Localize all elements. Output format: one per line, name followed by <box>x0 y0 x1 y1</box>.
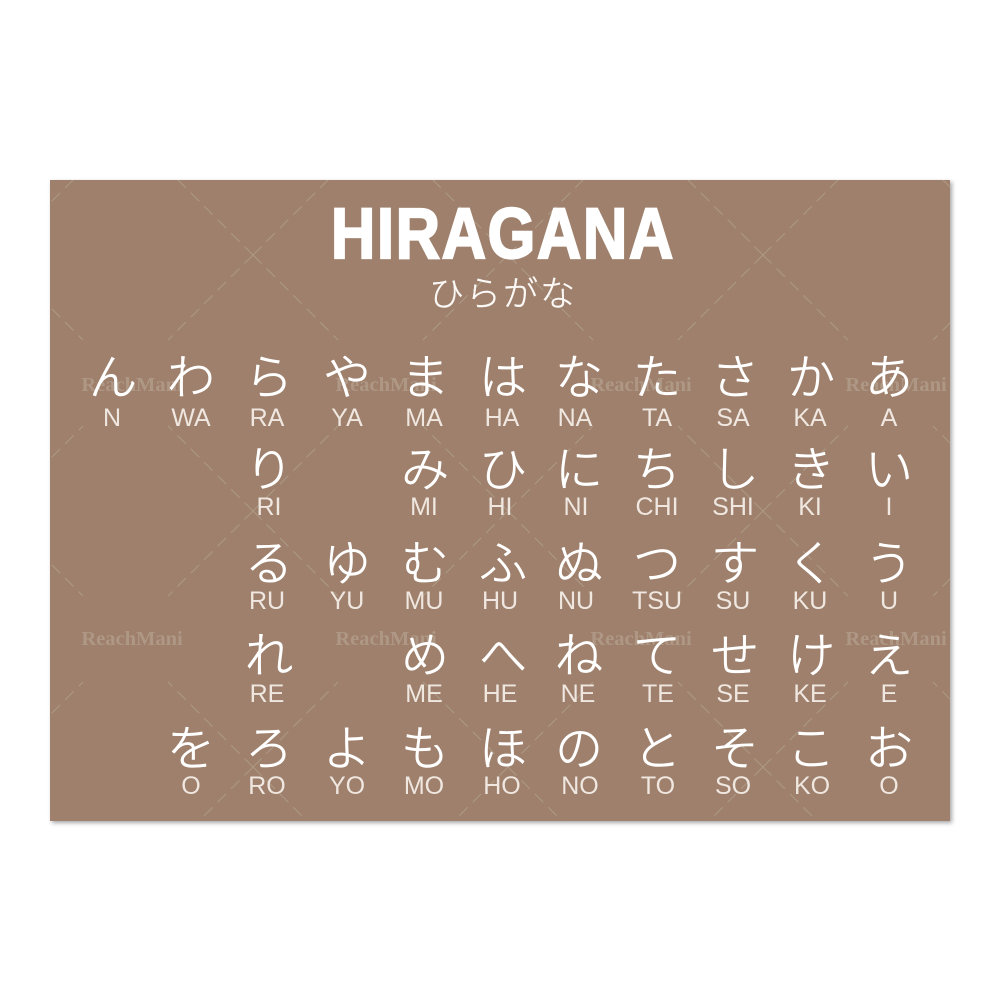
row 2: i-column: NI <box>564 493 588 521</box>
row 5: o-column: MO <box>404 772 444 800</box>
row 4: e-column: ME <box>405 680 443 708</box>
row 4: e-column: け <box>787 630 835 683</box>
watermarks: ReachMani <box>590 628 692 650</box>
watermarks: ReachMani <box>590 374 692 396</box>
panel: brown background <box>50 180 950 821</box>
row 2: i-column: I <box>886 493 892 521</box>
row 3: u-column: YU <box>330 587 364 615</box>
watermarks: ReachMani <box>845 628 947 650</box>
row 4: e-column: E <box>881 680 897 708</box>
row 2: i-column: CHI <box>635 493 679 521</box>
row 4: e-column: れ <box>245 630 293 683</box>
row 4: e-column: め <box>401 630 449 683</box>
row 2: i-column: ち <box>633 444 681 497</box>
watermarks: ReachMani <box>335 374 437 396</box>
row 1: a-column: た <box>633 352 681 405</box>
row 3: u-column <box>245 538 913 615</box>
row 4: e-column: SE <box>716 680 750 708</box>
row 5: o-column: お <box>865 723 913 776</box>
row 1: a-column: TA <box>642 404 672 432</box>
row 1: a-column: な <box>555 352 603 405</box>
row 3: u-column: ゆ <box>323 538 371 591</box>
row 5: o-column: ろ <box>245 723 293 776</box>
row 3: u-column: く <box>787 538 835 591</box>
row 4: e-column: ね <box>555 630 603 683</box>
row 5: o-column: HO <box>483 772 521 800</box>
row 3: u-column: U <box>880 587 898 615</box>
row 4: e-column: HE <box>483 680 517 708</box>
row 1: a-column: N <box>103 404 121 432</box>
row 5: o-column: を <box>167 723 215 776</box>
row 3: u-column: MU <box>405 587 443 615</box>
row 3: u-column: HU <box>482 587 518 615</box>
row 5: o-column: そ <box>711 723 759 776</box>
watermarks: ReachMani <box>81 374 183 396</box>
row 5: o-column: と <box>633 723 681 776</box>
row 1: a-column: SA <box>716 404 750 432</box>
row 5: o-column: も <box>401 723 449 776</box>
row 5: o-column: O <box>181 772 201 800</box>
row 3: u-column: NU <box>558 587 594 615</box>
row 2: i-column: に <box>555 444 603 497</box>
row 2: i-column: RI <box>256 493 282 521</box>
row 1: a-column: わ <box>167 352 215 405</box>
row 1: a-column <box>89 352 913 432</box>
row 2: i-column: ひ <box>479 444 527 497</box>
title: HIRAGANA <box>331 195 675 274</box>
row 3: u-column: TSU <box>632 587 682 615</box>
row 3: u-column: ふ <box>479 538 527 591</box>
row 4: e-column: へ <box>479 630 527 683</box>
row 5: o-column <box>167 723 913 800</box>
row 3: u-column: つ <box>633 538 681 591</box>
row 2: i-column: KI <box>798 493 822 521</box>
row 5: o-column: TO <box>641 772 675 800</box>
row 5: o-column: YO <box>329 772 365 800</box>
row 4: e-column: RE <box>250 680 284 708</box>
watermarks: ReachMani <box>335 628 437 650</box>
row 2: i-column: い <box>865 444 913 497</box>
row 2: i-column: み <box>401 444 449 497</box>
row 2: i-column: し <box>711 444 759 497</box>
watermarks: ReachMani <box>81 628 183 650</box>
row 1: a-column: か <box>787 352 835 405</box>
row 4: e-column: せ <box>711 630 759 683</box>
row 5: o-column: KO <box>794 772 830 800</box>
row 1: a-column: さ <box>711 352 759 405</box>
row 1: a-column: A <box>881 404 898 432</box>
row 4: e-column: て <box>633 630 681 683</box>
row 1: a-column: あ <box>865 352 913 405</box>
row 1: a-column: YA <box>331 404 363 432</box>
row 2: i-column: MI <box>410 493 438 521</box>
subtitle: ひらがな <box>429 275 577 314</box>
row 3: u-column: ぬ <box>555 538 603 591</box>
row 2: i-column <box>245 444 913 521</box>
row 5: o-column: の <box>555 723 603 776</box>
row 2: i-column: り <box>245 444 293 497</box>
row 1: a-column: は <box>479 352 527 405</box>
row 1: a-column: や <box>323 352 371 405</box>
row 4: e-column: KE <box>793 680 827 708</box>
row 4: e-column: NE <box>561 680 595 708</box>
row 3: u-column: SU <box>716 587 750 615</box>
watermarks: ReachMani <box>845 374 947 396</box>
watermarks <box>81 374 947 650</box>
row 3: u-column: RU <box>249 587 285 615</box>
row 1: a-column: RA <box>250 404 285 432</box>
row 5: o-column: ほ <box>479 723 527 776</box>
row 5: o-column: RO <box>248 772 286 800</box>
row 4: e-column: え <box>865 630 913 683</box>
row 5: o-column: よ <box>323 723 371 776</box>
row 3: u-column: す <box>711 538 759 591</box>
row 3: u-column: う <box>865 538 913 591</box>
row 2: i-column: き <box>787 444 835 497</box>
row 1: a-column: KA <box>793 404 827 432</box>
row 1: a-column: ま <box>401 352 449 405</box>
row 5: o-column: NO <box>561 772 599 800</box>
row 3: u-column: む <box>401 538 449 591</box>
row 5: o-column: SO <box>715 772 751 800</box>
row 2: i-column: HI <box>488 493 512 521</box>
row 1: a-column: ん <box>89 352 137 405</box>
row 4: e-column <box>245 630 913 708</box>
row 5: o-column: こ <box>787 723 835 776</box>
row 1: a-column: HA <box>485 404 520 432</box>
row 3: u-column: KU <box>793 587 827 615</box>
row 1: a-column: WA <box>171 404 211 432</box>
row 5: o-column: O <box>879 772 899 800</box>
row 4: e-column: TE <box>642 680 674 708</box>
row 2: i-column: SHI <box>712 493 754 521</box>
row 1: a-column: ら <box>245 352 293 405</box>
row 3: u-column: る <box>245 538 293 591</box>
row 1: a-column: MA <box>405 404 443 432</box>
row 1: a-column: NA <box>558 404 593 432</box>
